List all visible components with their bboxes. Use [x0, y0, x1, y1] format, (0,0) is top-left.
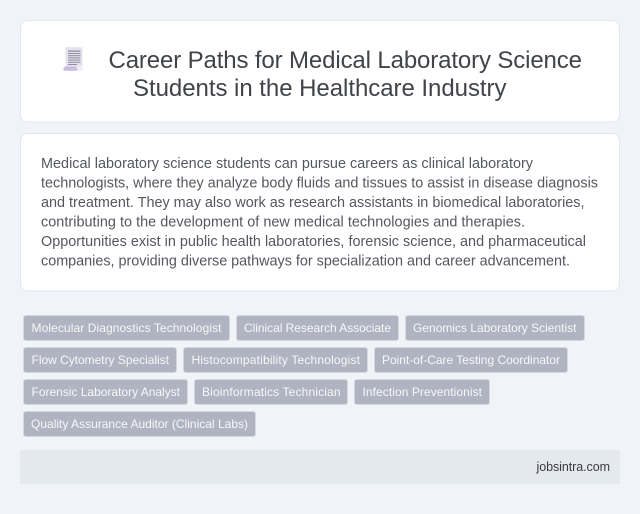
- description text: technologists, where they analyze body fluids and tissues to assist in disease diagnosis: [41, 176, 598, 192]
- description text: companies, providing diverse pathways for specialization and career advancement.: [41, 254, 570, 270]
- title: Career Paths for Medical Laboratory Science: [108, 47, 582, 74]
- footer: [20, 450, 620, 484]
- tag: [236, 316, 398, 340]
- tag: Clinical Research Associate: [244, 321, 391, 335]
- tag: Quality Assurance Auditor (Clinical Labs): [31, 417, 248, 431]
- description text: and treatment. They may also work as research assistants in biomedical laboratories,: [41, 195, 584, 211]
- tag: Bioinformatics Technician: [202, 385, 340, 399]
- tag: [184, 348, 368, 372]
- description text: Opportunities exist in public health laboratories, forensic science, and pharmaceutical: [41, 234, 586, 250]
- tag: Molecular Diagnostics Technologist: [32, 321, 222, 335]
- tag: [374, 348, 568, 372]
- footer source text: jobsintra.com: [536, 460, 610, 474]
- tag: Flow Cytometry Specialist: [32, 353, 170, 367]
- panel: description card: [20, 134, 620, 291]
- tag: Genomics Laboratory Scientist: [413, 321, 577, 335]
- tag: [406, 316, 584, 340]
- tag: [24, 316, 230, 340]
- tag: Infection Preventionist: [362, 385, 483, 399]
- tag: [24, 412, 256, 436]
- description text: contributing to the development of new medical technologies and therapies.: [41, 214, 525, 230]
- panel: title card: [20, 20, 620, 122]
- tag: [24, 380, 188, 404]
- tag: Histocompatibility Technologist: [192, 353, 361, 367]
- title: Students in the Healthcare Industry: [133, 75, 506, 102]
- tag: Point-of-Care Testing Coordinator: [382, 353, 560, 367]
- tag: Forensic Laboratory Analyst: [32, 385, 181, 399]
- tag: [24, 348, 176, 372]
- tag: [354, 380, 490, 404]
- tag list: [24, 316, 584, 436]
- tag: [194, 380, 348, 404]
- description text: Medical laboratory science students can pursue careers as clinical laboratory: [41, 156, 534, 172]
- icon: document scroll: [63, 47, 82, 71]
